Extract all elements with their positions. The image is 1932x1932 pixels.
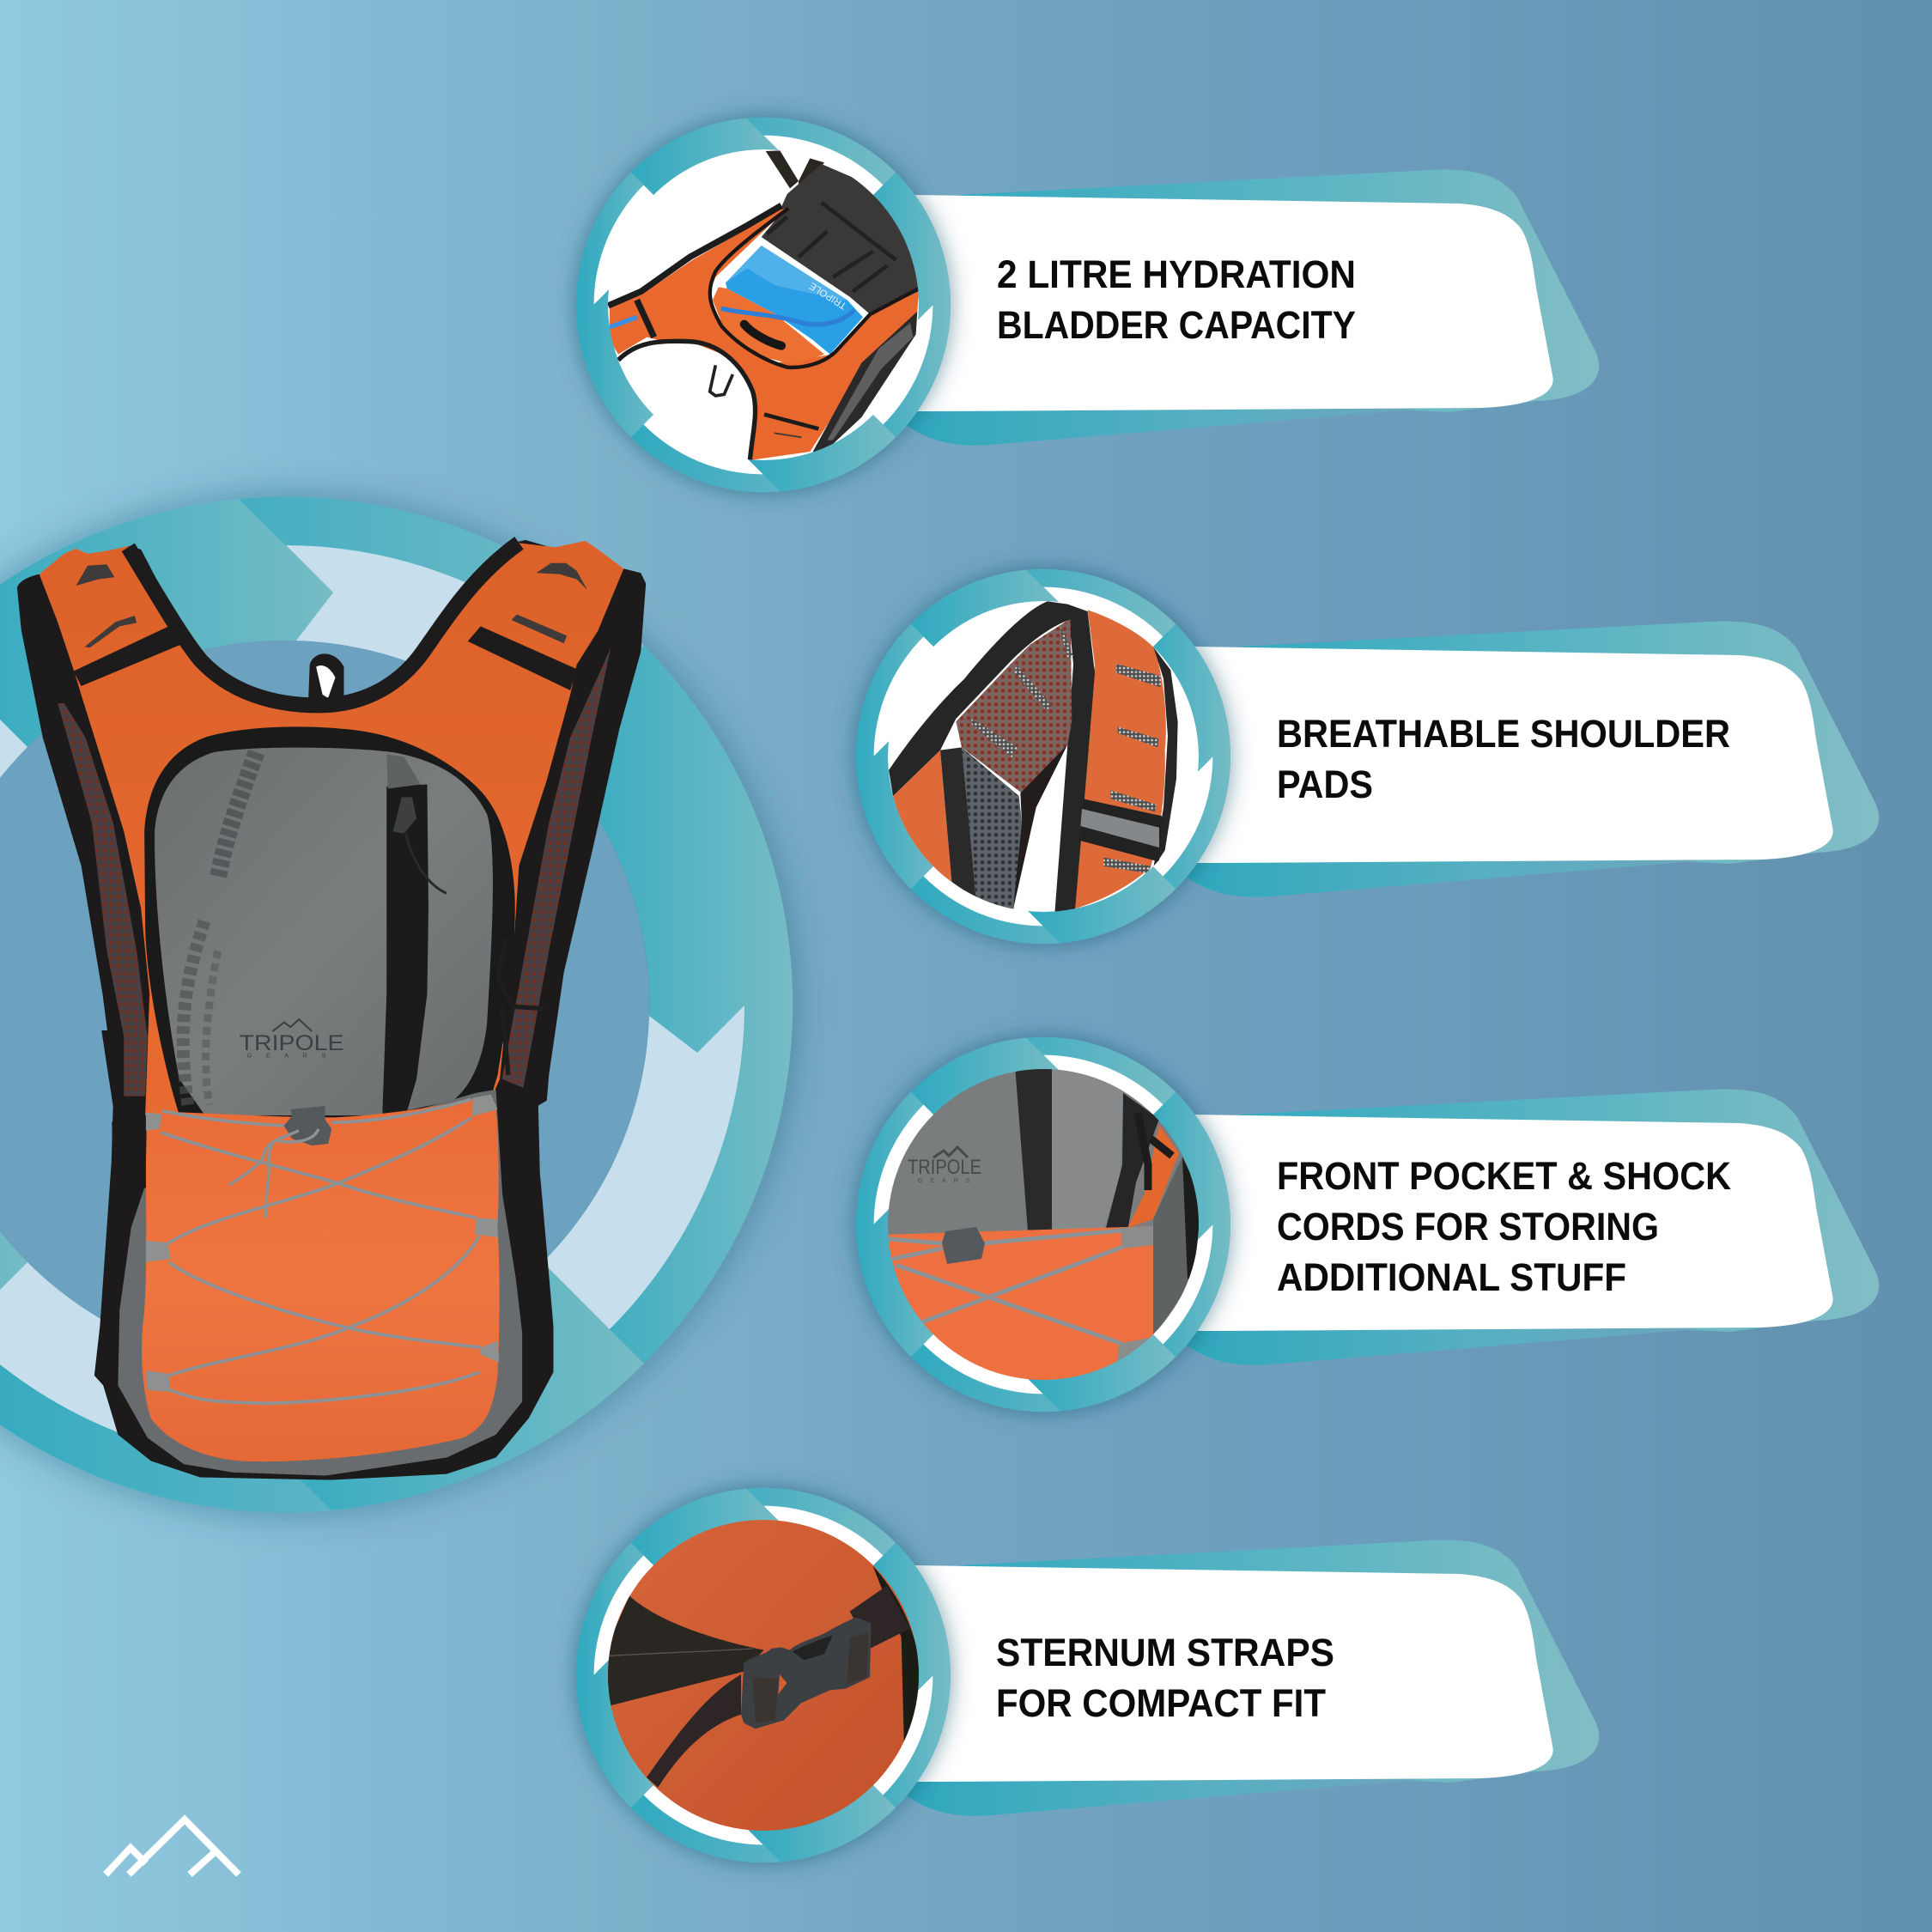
banner 2 text: PADS [1277, 762, 1373, 806]
cord tabs [146, 1095, 499, 1392]
pocket logo text: TRIPOLE [240, 1031, 343, 1055]
lower black back silhouette [94, 1030, 553, 1480]
hang loop [308, 653, 343, 699]
photo 1 contents: TRIPOLE [807, 280, 848, 311]
photo 3 contents [880, 1066, 1202, 1388]
banner 4 text: STERNUM STRAPS [996, 1631, 1334, 1674]
zipper flap [386, 755, 421, 788]
banner 4 text: FOR COMPACT FIT [996, 1681, 1326, 1725]
banner 3 text: CORDS FOR STORING [1277, 1205, 1659, 1249]
zipper pull and cord [393, 797, 416, 834]
cord lock [284, 1106, 331, 1145]
banner 1 text: BLADDER CAPACITY [997, 303, 1356, 347]
photo 4 contents [604, 1516, 922, 1834]
pocket logo mountains [272, 1019, 312, 1031]
tire tread print [183, 752, 256, 1105]
banner 2 [1129, 621, 1879, 897]
badge 3: front pocket photo [856, 1037, 1230, 1412]
gray wrap behind pocket [118, 1090, 522, 1476]
hanging cord ends [228, 1129, 319, 1218]
badge 2: shoulder pad photo [856, 569, 1230, 944]
backpack product image [17, 540, 646, 1480]
badge 1: hydration bladder photo [576, 118, 951, 492]
photo 3 contents: GEARS [918, 1178, 978, 1184]
banner 4 [849, 1540, 1599, 1816]
photo 2 contents [888, 601, 1199, 914]
banner 2 text: BREATHABLE SHOULDER [1277, 712, 1730, 756]
banner 3 text: ADDITIONAL STUFF [1277, 1255, 1626, 1299]
strap holes [76, 563, 587, 647]
badge 4: sternum strap photo [576, 1488, 951, 1862]
strap cross bands [74, 626, 577, 690]
left mesh strip [58, 703, 148, 1097]
banner 2 text [1277, 712, 1730, 806]
orange front pocket [142, 1097, 500, 1461]
banner 3 [1129, 1089, 1879, 1365]
side cord tangle [498, 939, 544, 1075]
zipper stripe [382, 784, 428, 1115]
upper bag body [17, 540, 646, 1194]
banner 4 text [996, 1631, 1334, 1725]
banner 1 [849, 169, 1599, 446]
photo 1 contents [608, 149, 919, 460]
banner 3 text [1277, 1154, 1731, 1299]
orange front panel [39, 541, 623, 1115]
gray pocket black border [144, 726, 515, 1115]
neck binding [128, 543, 519, 705]
black silhouette and straps [17, 540, 646, 1194]
large ring behind backpack [0, 497, 793, 1512]
photo 3 contents: TRIPOLE [908, 1156, 981, 1179]
banner 1 text [997, 252, 1356, 347]
shock cords [161, 1099, 481, 1403]
gray pocket fill [155, 748, 493, 1115]
banner 1 text: 2 LITRE HYDRATION [997, 252, 1356, 296]
icon: mountain logo [106, 1820, 239, 1874]
right mesh strip [502, 647, 611, 1088]
pocket logo sub text: GEARS [247, 1051, 340, 1059]
lower bag and front pocket [118, 1090, 522, 1476]
banner 3 text: FRONT POCKET & SHOCK [1277, 1154, 1731, 1198]
